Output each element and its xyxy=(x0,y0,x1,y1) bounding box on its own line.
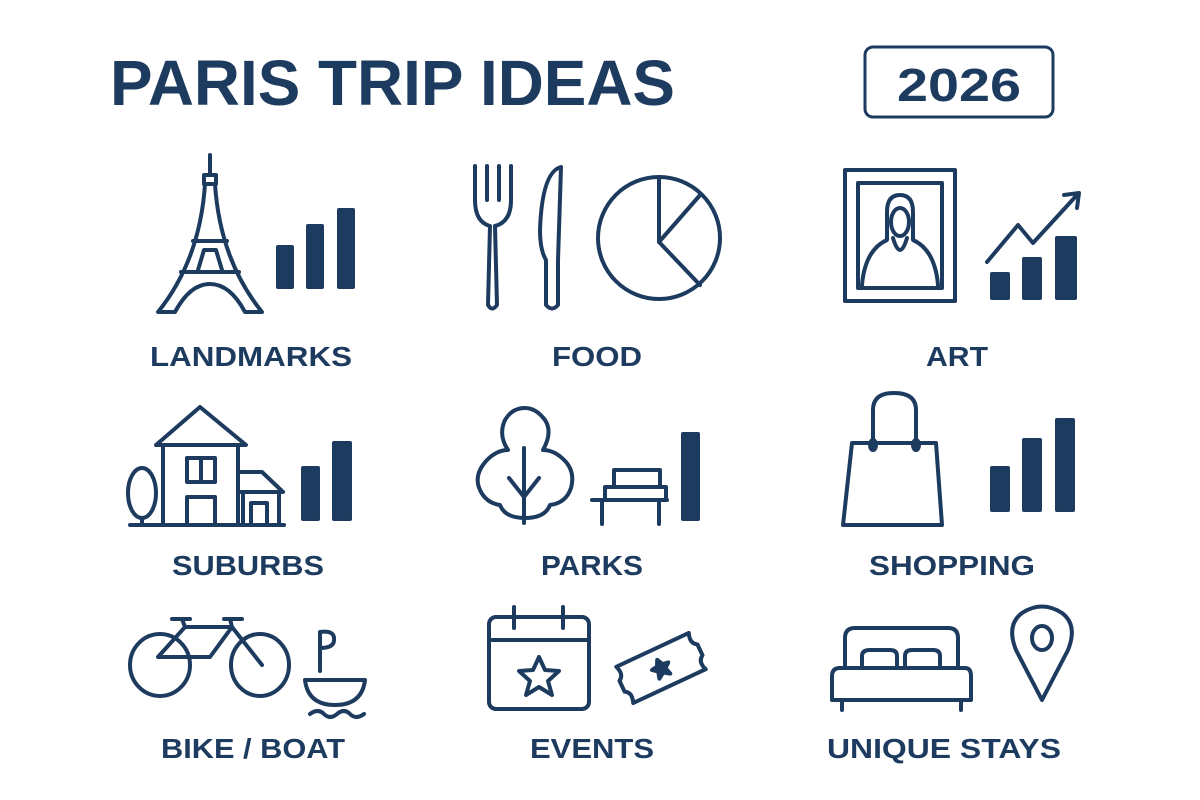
chart: rising bars with arrow xyxy=(987,193,1079,300)
panel: bike / boat xyxy=(130,619,365,764)
panel: events xyxy=(489,607,708,764)
icon: fork xyxy=(475,166,511,308)
icon: eiffel tower xyxy=(158,155,262,312)
icon: location pin xyxy=(1012,606,1072,700)
label: EVENTS xyxy=(530,733,654,764)
title: PARIS TRIP IDEAS xyxy=(110,47,675,119)
icon: calendar with star xyxy=(489,607,589,709)
bar chart xyxy=(276,208,355,289)
year badge: 2026 xyxy=(897,59,1021,111)
icon: tree xyxy=(478,408,572,523)
panel: shopping xyxy=(843,393,1075,581)
icon: pie chart xyxy=(598,177,720,299)
icon: framed portrait xyxy=(845,170,955,301)
icon: bed xyxy=(832,628,971,710)
panel: landmarks xyxy=(150,155,355,372)
label: BIKE / BOAT xyxy=(161,733,345,764)
label: UNIQUE STAYS xyxy=(827,733,1061,764)
panel: unique stays xyxy=(827,606,1072,764)
label: SUBURBS xyxy=(172,550,324,581)
bar chart xyxy=(990,418,1075,512)
icon: houses and tree xyxy=(128,407,284,525)
panel: art xyxy=(845,170,1079,372)
year badge xyxy=(865,47,1053,117)
icon: boat xyxy=(305,632,365,717)
panel: food xyxy=(475,166,720,372)
label: ART xyxy=(926,341,988,372)
label: PARKS xyxy=(541,550,643,581)
icon: ticket xyxy=(614,632,708,704)
bar chart xyxy=(681,432,700,521)
icon: bench xyxy=(592,470,667,524)
label: SHOPPING xyxy=(869,550,1035,581)
label: LANDMARKS xyxy=(150,341,352,372)
panel: parks xyxy=(478,408,700,581)
icon: shopping bag xyxy=(843,393,942,525)
icon: bicycle xyxy=(130,619,289,696)
panel: suburbs xyxy=(128,407,352,581)
label: FOOD xyxy=(552,341,642,372)
bar chart xyxy=(301,441,352,521)
icon: knife xyxy=(540,167,561,308)
